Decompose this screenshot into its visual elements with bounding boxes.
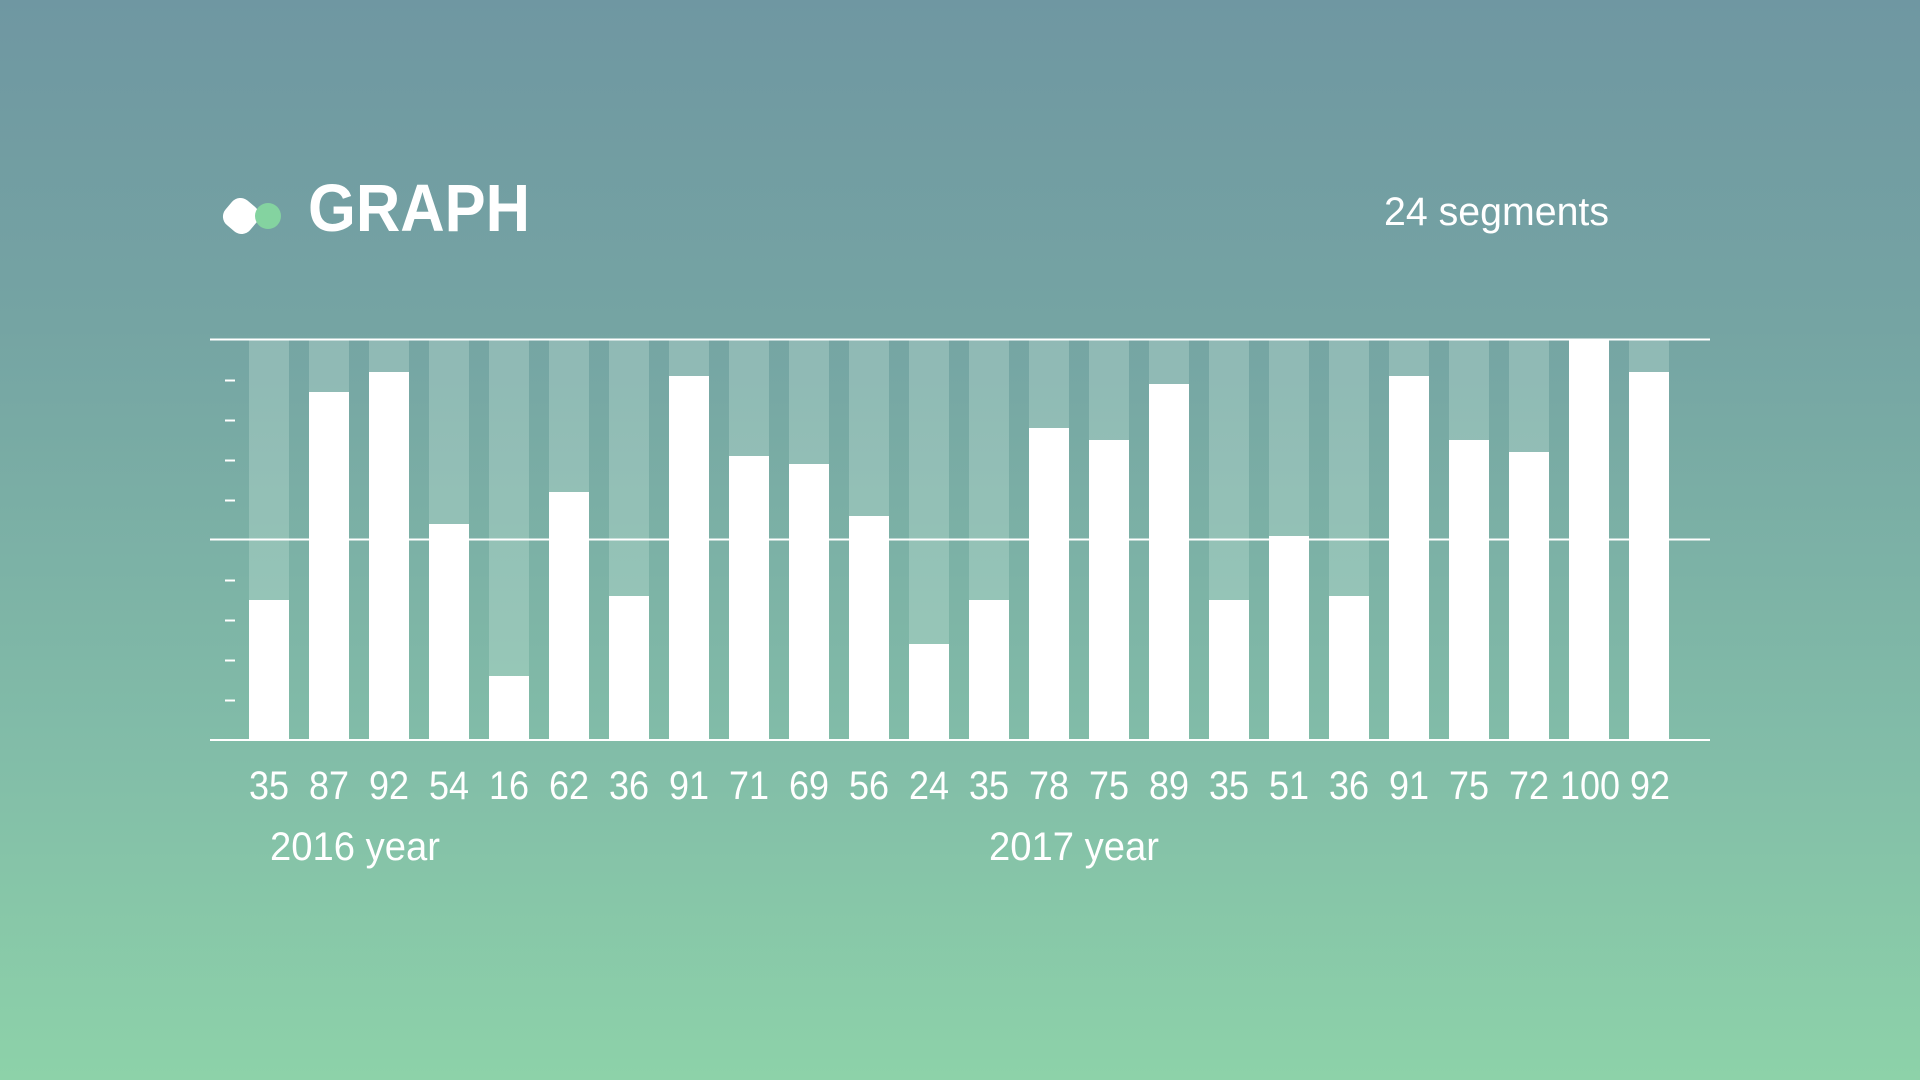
value labels: 92 xyxy=(1630,764,1670,808)
value labels: 36 xyxy=(1329,764,1369,808)
value labels: 92 xyxy=(369,764,409,808)
value labels: 87 xyxy=(309,764,349,808)
value labels: 35 xyxy=(969,764,1009,808)
value labels: 75 xyxy=(1089,764,1129,808)
value labels: 16 xyxy=(489,764,529,808)
value labels: 89 xyxy=(1149,764,1189,808)
year label 2017: 2017 year xyxy=(989,825,1159,869)
value labels: 51 xyxy=(1269,764,1309,808)
value labels: 54 xyxy=(429,764,469,808)
value labels: 69 xyxy=(789,764,829,808)
segment count: 24 segments xyxy=(1384,190,1609,234)
value labels: 91 xyxy=(1389,764,1429,808)
title: GRAPH xyxy=(308,171,530,246)
value labels: 100 xyxy=(1560,764,1620,808)
value labels: 36 xyxy=(609,764,649,808)
background bars xyxy=(249,340,1669,740)
value labels: 72 xyxy=(1509,764,1549,808)
value labels: 24 xyxy=(909,764,949,808)
value labels: 56 xyxy=(849,764,889,808)
year label 2016: 2016 year xyxy=(270,825,440,869)
value labels: 75 xyxy=(1449,764,1489,808)
value labels: 35 xyxy=(1209,764,1249,808)
icon: two dots xyxy=(218,193,281,239)
value labels: 35 xyxy=(249,764,289,808)
bar chart xyxy=(210,338,1710,741)
axis lines xyxy=(210,338,1710,741)
axis ticks xyxy=(225,380,235,702)
value labels: 71 xyxy=(729,764,769,808)
value labels: 62 xyxy=(549,764,589,808)
value labels: 78 xyxy=(1029,764,1069,808)
value labels: 91 xyxy=(669,764,709,808)
value bars xyxy=(249,340,1669,740)
value labels xyxy=(249,764,1670,808)
